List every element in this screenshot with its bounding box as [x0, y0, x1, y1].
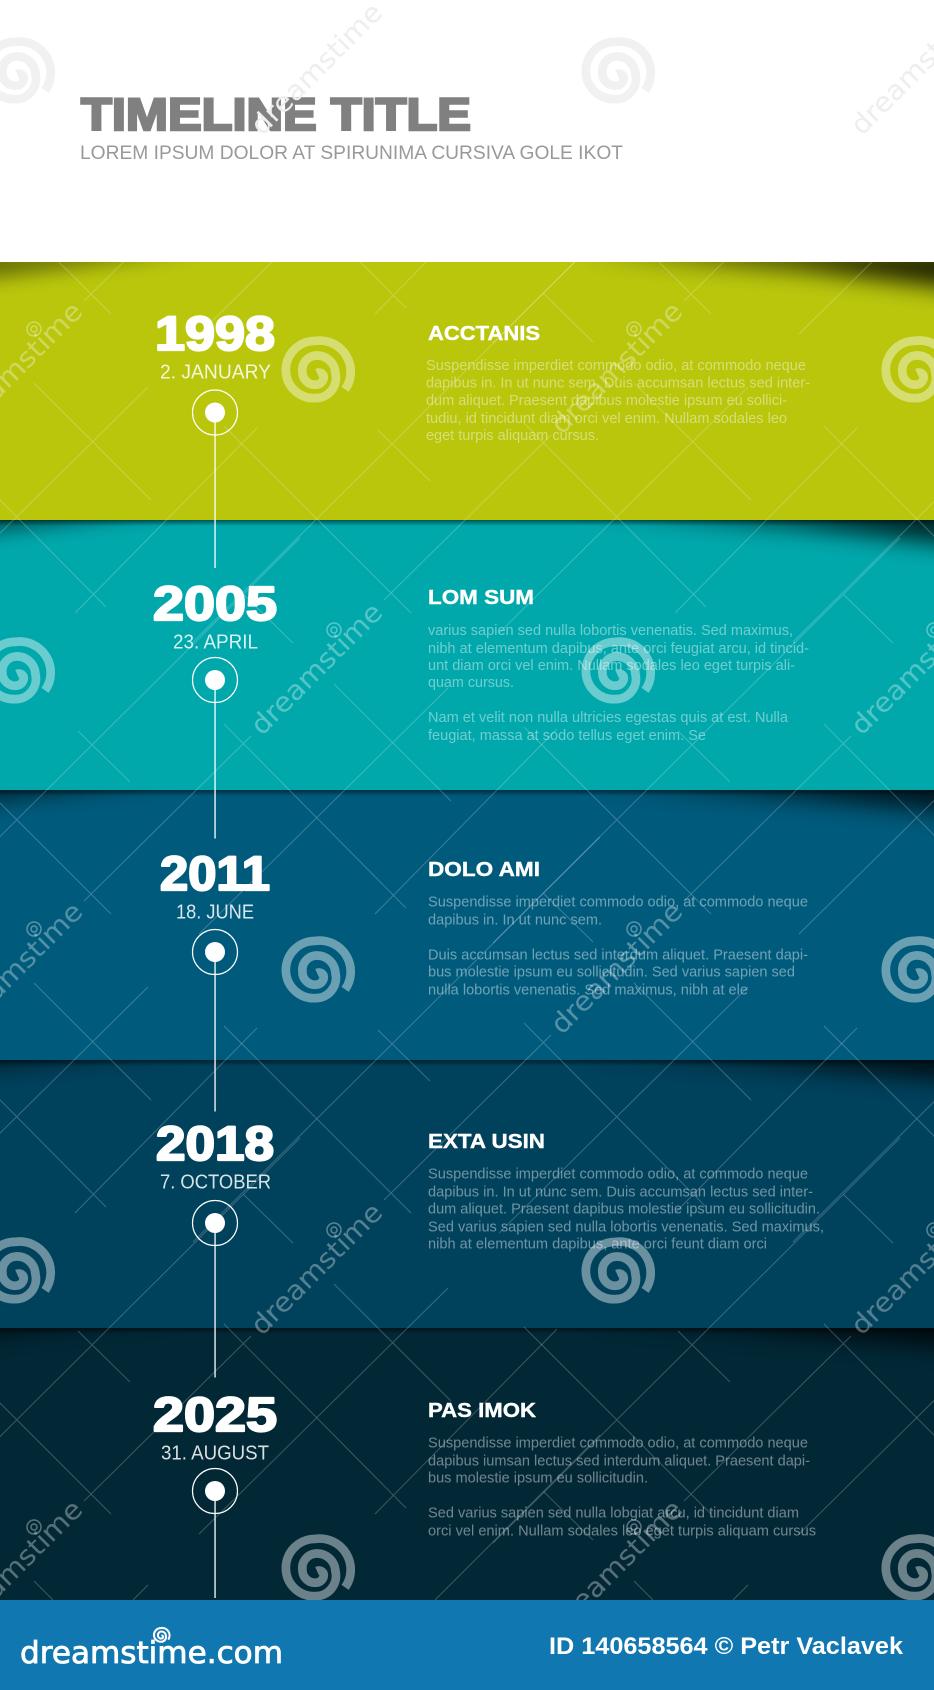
title: TIMELINE TITLE: [81, 89, 471, 140]
panel: 2011 band: [0, 778, 934, 1112]
date: 2. January: 2. JANUARY: [160, 362, 271, 384]
body text: Pas Imok: bus molestie ipsum eu sollicitudin.: [428, 1470, 648, 1486]
watermark: dreamstime text: dreamstime: [545, 896, 689, 1040]
body text: Dolo Ami: bus molestie ipsum eu sollicitudin. Sed varius sapien sed: [428, 964, 795, 980]
body text: Lom Sum: Nam et velit non nulla ultricies egestas quis at est. Nulla: [428, 710, 789, 726]
date: 23. April: 23. APRIL: [173, 632, 258, 654]
body text: Dolo Ami: dapibus in. In ut nunc sem.: [428, 912, 602, 928]
panel: 2005 band: [0, 508, 934, 838]
panel: header: [0, 0, 934, 262]
body text: Lom Sum: quam cursus.: [428, 675, 514, 691]
body text: Acctanis: eget turpis aliquam cursus.: [426, 428, 599, 444]
watermark: dreamstime text: dreamstime: [545, 296, 689, 440]
panel: 2018 band: [0, 1048, 934, 1378]
watermark: spirals: [0, 341, 934, 1596]
heading: Lom Sum: LOM SUM: [428, 586, 534, 609]
body text: Exta Usin: nibh at elementum dapibus, ante orci feunt diam orci: [428, 1236, 767, 1252]
body text: Acctanis: dapibus in. In ut nunc sem. Duis accumsan lectus sed inter-: [426, 376, 810, 392]
date: 18. June: 18. JUNE: [176, 902, 254, 924]
timeline marker: 2011: [192, 930, 238, 1112]
heading: Dolo Ami: DOLO AMI: [428, 858, 540, 881]
heading: Acctanis: ACCTANIS: [428, 322, 540, 345]
body text: Dolo Ami: Suspendisse imperdiet commodo odio, at commodo neque: [428, 894, 808, 910]
year: 2005: 2005: [153, 578, 277, 631]
watermark: dreamstime text: dreamstime: [245, 597, 389, 741]
body text: Pas Imok: Sed varius sapien sed nulla lobgiat arcu, id tincidunt diam: [428, 1506, 799, 1522]
watermark: dreamstime text: dreamstime: [245, 1197, 389, 1341]
body text: Acctanis: Suspendisse imperdiet commodo odio, at commodo neque: [426, 358, 806, 374]
year: 2025: 2025: [153, 1389, 277, 1442]
body text: Exta Usin: [428, 1166, 824, 1252]
body text: Dolo Ami: [428, 894, 808, 998]
timeline marker: 2005: [192, 658, 238, 838]
date: 7. October: 7. OCTOBER: [160, 1172, 271, 1194]
timeline marker: 1998: [192, 390, 238, 568]
body text: Exta Usin: dum aliquet. Praesent dapibus molestie ipsum eu sollicitudin.: [428, 1202, 820, 1218]
footer logo: dreamstime.com: dreamstime.com: [20, 1636, 283, 1671]
watermark: dreamstime text: [0, 296, 934, 1638]
body text: Acctanis: tudiu, id tincidunt diam orci vel enim. Nullam sodales leo: [426, 411, 787, 427]
watermark: header spirals: [0, 42, 651, 99]
body text: Dolo Ami: nulla lobortis venenatis. Sed maximus, nibh at ele: [428, 982, 748, 998]
subtitle: LOREM IPSUM DOLOR AT SPIRUNIMA CURSIVA GOLE IKOT: [80, 142, 623, 164]
heading: Pas Imok: PAS IMOK: [428, 1399, 536, 1422]
body text: Lom Sum: nibh at elementum dapibus, ante orci feugiat arcu, id tincid-: [428, 641, 809, 657]
watermark: header text: [245, 0, 934, 141]
body text: Dolo Ami: Duis accumsan lectus sed interdum aliquet. Praesent dapi-: [428, 948, 808, 964]
body text: Lom Sum: varius sapien sed nulla lobortis venenatis. Sed maximus,: [428, 623, 793, 639]
panel: 1998 band: [0, 250, 934, 568]
body text: Acctanis: [426, 358, 810, 444]
body text: Exta Usin: dapibus in. In ut nunc sem. Duis accumsan lectus sed inter-: [428, 1184, 813, 1200]
footer credit: ID 140658564 © Petr Vaclavek: [549, 1633, 904, 1660]
watermark: small copyright spirals: [27, 322, 934, 1534]
body text: Lom Sum: [428, 623, 809, 744]
body text: Exta Usin: Suspendisse imperdiet commodo odio, at commodo neque: [428, 1166, 808, 1182]
body text: Pas Imok: [428, 1436, 816, 1540]
body text: Acctanis: dum aliquet. Praesent dapibus molestie ipsum eu sollici-: [426, 393, 787, 409]
year: 2011: 2011: [160, 848, 270, 901]
body text: Pas Imok: orci vel enim. Nullam sodales leo eget turpis aliquam cursus: [428, 1524, 816, 1540]
date: 31. August: 31. AUGUST: [161, 1442, 269, 1464]
heading: Exta Usin: EXTA USIN: [428, 1130, 545, 1153]
body text: Pas Imok: Suspendisse imperdiet commodo odio, at commodo neque: [428, 1436, 808, 1452]
body text: Lom Sum: unt diam orci vel enim. Nullam sodales leo eget turpis ali-: [428, 658, 795, 674]
body text: Lom Sum: feugiat, massa at sodo tellus eget enim. Se: [428, 728, 706, 744]
year: 2018: 2018: [156, 1118, 274, 1171]
timeline marker: 2025: [192, 1468, 238, 1598]
panel: 2025 band: [0, 1316, 934, 1600]
footer bar: [0, 1600, 934, 1690]
icon: footer spiral: [154, 1628, 170, 1642]
year: 1998: 1998: [155, 308, 275, 361]
watermark: dreamstime text: dreamstime: [545, 1494, 689, 1638]
timeline marker: 2018: [192, 1200, 238, 1378]
body text: Exta Usin: Sed varius sapien sed nulla lobortis venenatis. Sed maximus,: [428, 1220, 824, 1236]
watermark: header text: dreamstime: [245, 0, 389, 141]
body text: Pas Imok: dapibus iumsan lectus sed interdum aliquet. Praesent dapi-: [428, 1454, 810, 1470]
